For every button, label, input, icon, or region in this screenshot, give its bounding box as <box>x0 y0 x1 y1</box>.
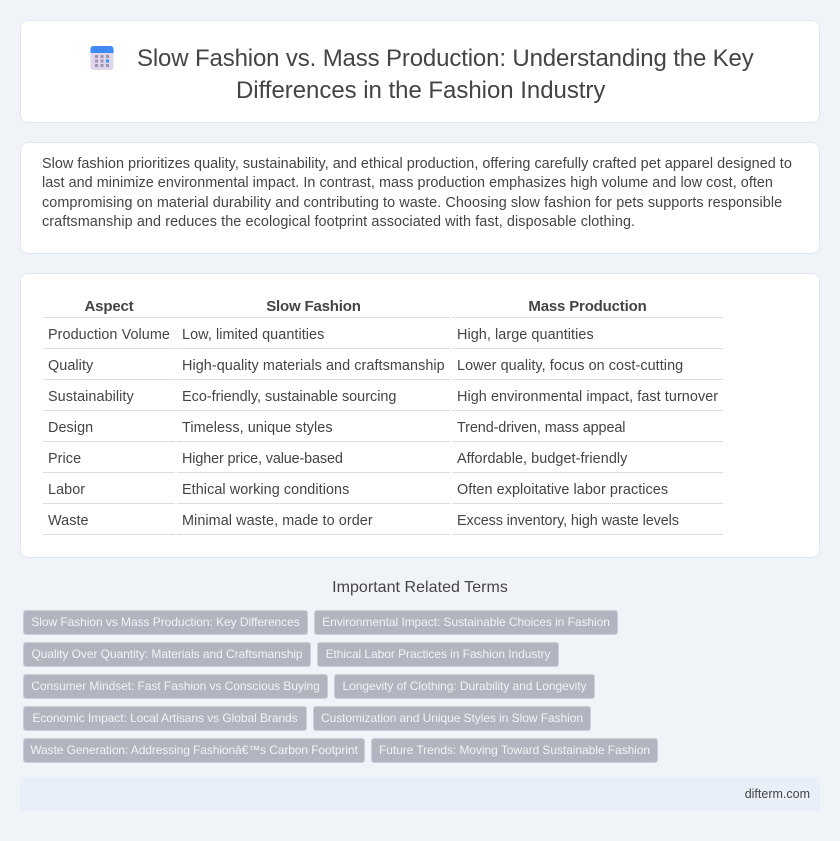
comparison table: Production Volume <box>48 327 170 343</box>
comparison table: Sustainability <box>48 389 134 405</box>
tag group: related terms: Ethical Labor Practices in Fashion Industry <box>326 647 550 661</box>
tag group: related terms: Consumer Mindset: Fast Fashion vs Conscious Buying <box>31 679 320 693</box>
comparison table: Lower quality, focus on cost-cutting <box>457 358 683 374</box>
tag group: related terms: Longevity of Clothing: Durability and Longevity <box>342 679 586 693</box>
tag group: related terms: Customization and Unique Styles in Slow Fashion <box>321 711 583 725</box>
tag group: related terms <box>23 610 658 763</box>
tag group: related terms: Economic Impact: Local Artisans vs Global Brands <box>32 711 298 725</box>
comparison table: Low, limited quantities <box>182 327 324 343</box>
comparison table: Labor <box>48 482 85 498</box>
text block: introduction: compromising on material durability and contributing to waste. Choosing slow fashion for pets supports responsible <box>42 194 782 210</box>
heading: related terms: Important Related Terms <box>332 579 508 596</box>
panel: introduction <box>20 142 820 254</box>
comparison table <box>43 298 723 535</box>
comparison table: High-quality materials and craftsmanship <box>182 358 445 374</box>
text block: introduction: craftsmanship and reduces the ecological footprint associated with fast, disposable clothing. <box>42 214 635 230</box>
panel: title card <box>20 20 820 123</box>
comparison table: Timeless, unique styles <box>182 420 333 436</box>
comparison table: Design <box>48 420 93 436</box>
comparison table: High, large quantities <box>457 327 594 343</box>
comparison table: Price <box>48 451 81 467</box>
icon: calendar <box>90 46 114 70</box>
comparison table: Aspect <box>85 298 133 315</box>
comparison table: Higher price, value-based <box>182 451 343 467</box>
text block: introduction: Slow fashion prioritizes quality, sustainability, and ethical production, offering carefully crafted pet apparel designed to <box>42 156 792 172</box>
comparison table: Minimal waste, made to order <box>182 513 373 529</box>
comparison table: Ethical working conditions <box>182 482 349 498</box>
text block: introduction: last and minimize environmental impact. In contrast, mass production emphasizes high volume and low cost, often <box>42 175 773 191</box>
comparison table: Often exploitative labor practices <box>457 482 668 498</box>
comparison table: High environmental impact, fast turnover <box>457 389 718 405</box>
comparison table: Trend-driven, mass appeal <box>457 420 625 436</box>
comparison table: Mass Production <box>528 298 647 315</box>
footer bar <box>20 777 820 811</box>
tag group: related terms: Waste Generation: Addressing Fashionâ€™s Carbon Footprint <box>30 743 358 757</box>
comparison table: Waste <box>48 513 89 529</box>
comparison table: Affordable, budget-friendly <box>457 451 627 467</box>
panel: comparison table <box>20 273 820 558</box>
title: Differences in the Fashion Industry <box>236 77 605 104</box>
tag group: related terms: Quality Over Quantity: Materials and Craftsmanship <box>31 647 303 661</box>
tag group: related terms: Slow Fashion vs Mass Production: Key Differences <box>31 615 300 629</box>
title <box>137 45 754 104</box>
text block: introduction <box>42 156 792 230</box>
comparison table: Quality <box>48 358 93 374</box>
comparison table: Slow Fashion <box>266 298 361 315</box>
tag group: related terms: Future Trends: Moving Toward Sustainable Fashion <box>379 743 650 757</box>
comparison table: Eco-friendly, sustainable sourcing <box>182 389 396 405</box>
footer: site name: difterm.com <box>745 787 810 801</box>
title: Slow Fashion vs. Mass Production: Understanding the Key <box>137 45 754 72</box>
tag group: related terms: Environmental Impact: Sustainable Choices in Fashion <box>322 615 610 629</box>
comparison table: Excess inventory, high waste levels <box>457 513 679 529</box>
